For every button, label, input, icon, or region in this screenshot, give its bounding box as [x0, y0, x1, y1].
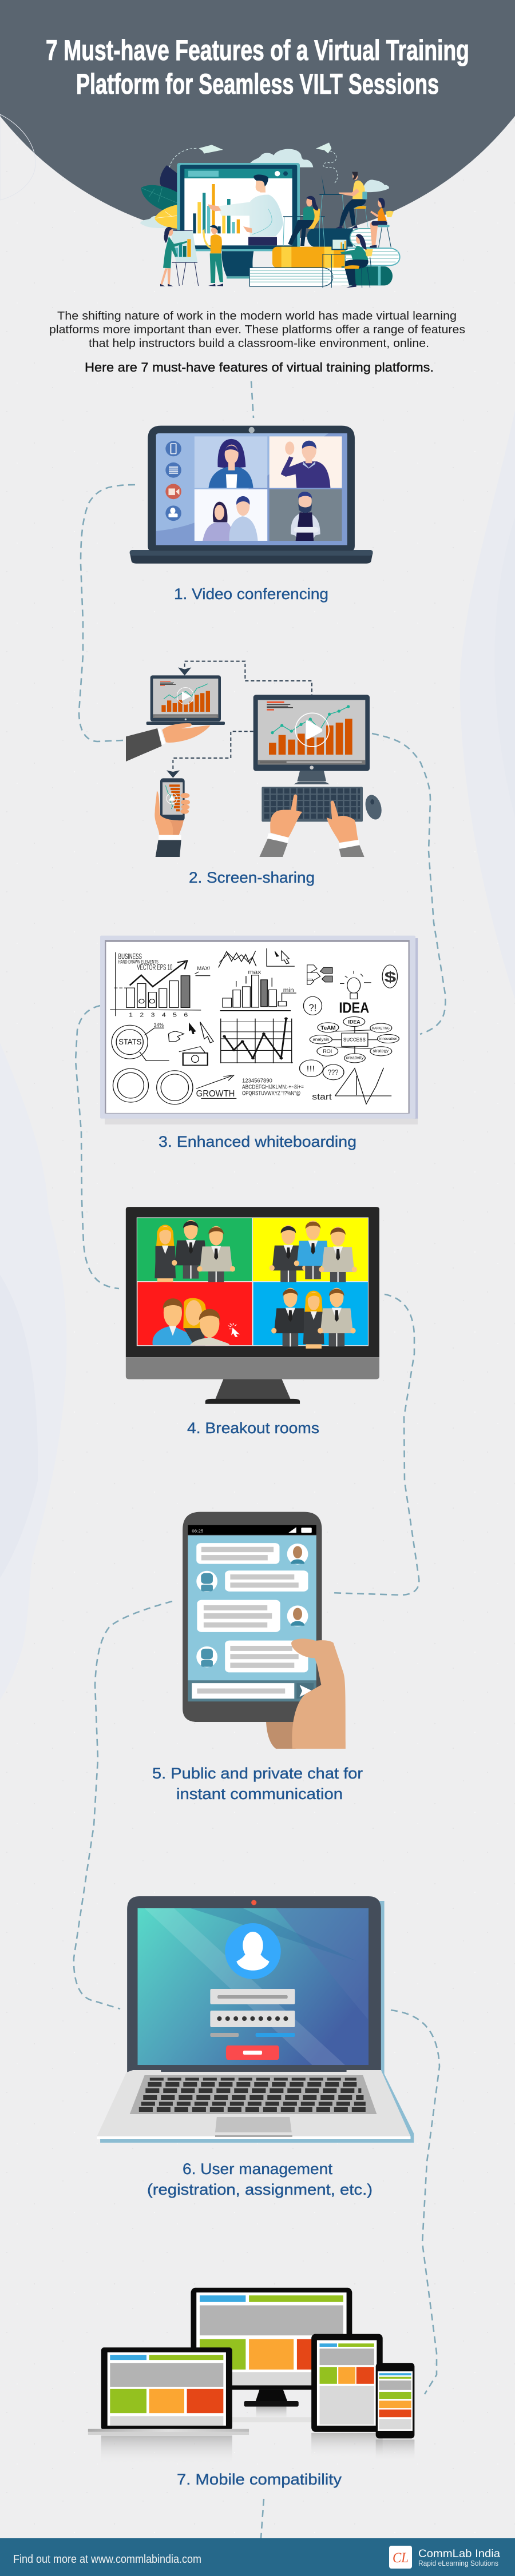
sketch: line graph grid [221, 1017, 293, 1063]
sketch: idea bulb, dollar and arrows: ?! [309, 1002, 316, 1014]
heading: enhanced whiteboarding: 3. Enhanced whiteboarding [159, 1133, 356, 1150]
sketch: mind map: MARKETING [372, 1026, 390, 1030]
tablet [311, 2334, 383, 2432]
sketch: stats wheel and cursors: 34% [154, 1023, 164, 1028]
leaves [141, 165, 177, 229]
heading: user management: (registration, assignment, etc.) [147, 2181, 373, 2198]
heading: user management: 6. User management [183, 2160, 333, 2178]
intro paragraph: platforms more important than ever. These platforms offer a range of features [49, 324, 465, 336]
sketch: mind map [310, 1017, 399, 1063]
feature 3: whiteboard with sketches: 123456 [129, 1012, 188, 1018]
sketch: mind map: IDEA [348, 1020, 360, 1025]
video tile: bearded man [270, 489, 342, 541]
sketch: rings, growth and lettering: start [312, 1092, 332, 1102]
smartphone [376, 2363, 414, 2438]
video tile: woman [195, 436, 267, 488]
dashed connector path between features [74, 381, 445, 2538]
desktop monitor [253, 695, 370, 784]
sketch: rings, growth and lettering [113, 1060, 391, 1104]
intro lead-in line: Here are 7 must-have features of virtual training platforms. [85, 360, 434, 374]
user avatar [225, 1923, 281, 1979]
status bar [192, 1527, 312, 1533]
heading: screen-sharing: 2. Screen-sharing [189, 869, 315, 886]
clouds [140, 149, 389, 228]
click cursor [228, 1323, 240, 1337]
sketch: rings, growth and lettering: ABCDEFGHIJKLMN:-+~8/+= [242, 1084, 304, 1090]
sketch: mind map: ROI [323, 1049, 332, 1055]
status bar: 08:25 [192, 1528, 203, 1533]
logo: CommLab India: CommLab India [418, 2548, 500, 2560]
sketch: idea bulb, dollar and arrows: IDEA [339, 1000, 369, 1016]
sketch: mind map: SUCCESS [343, 1037, 366, 1042]
heading: user management [147, 2160, 373, 2198]
sketch: rings, growth and lettering: OPQRSTUVWXYZ "!?%N°@ [242, 1091, 300, 1096]
room: green [137, 1218, 252, 1285]
sketch: idea bulb, dollar and arrows [303, 965, 398, 1016]
footer link text: Find out more at www.commlabindia.com [13, 2553, 201, 2566]
room: blue [253, 1282, 368, 1349]
intro paragraph [49, 310, 465, 350]
feature 3: whiteboard with sketches: HAND-DRAWN ELEMENTS [118, 960, 159, 965]
presenter [208, 174, 283, 245]
man at high desk [319, 172, 368, 229]
heading: video conferencing: 1. Video conferencing [174, 585, 328, 603]
heading: breakout rooms: 4. Breakout rooms [187, 1419, 319, 1437]
feature 3: whiteboard with sketches: min [283, 987, 294, 993]
smartphone in hand [154, 778, 190, 857]
sketch: mind map: innovation [379, 1036, 398, 1041]
feature 2: screen-sharing devices [126, 661, 384, 857]
reflections [101, 2407, 414, 2465]
message input bar [188, 1680, 316, 1701]
feature 3: whiteboard with sketches: MAX! [197, 966, 210, 971]
desktop monitor [191, 2288, 352, 2407]
chat bubbles [196, 1543, 308, 1672]
feature 7: responsive devices [88, 2288, 414, 2465]
logo: CommLab India [389, 2546, 500, 2569]
feature 1: laptop with video call [130, 426, 373, 564]
sketch: rings, growth and lettering: 1234567890 [242, 1078, 272, 1084]
feature 4: monitor with breakout rooms [126, 1207, 379, 1404]
feature 3: whiteboard with sketches: VECTOR EPS 10 [137, 963, 172, 972]
sketch: mind map: strategy [373, 1049, 389, 1053]
stacked books [221, 228, 400, 286]
feature 3: whiteboard with sketches: max [248, 970, 262, 975]
feature 5: phone with chat held in hand [183, 1512, 346, 1749]
icon: paper planes and flight paths [150, 142, 338, 197]
side toolbar icons [165, 441, 181, 521]
sketch: rings, growth and lettering: !!! [307, 1065, 315, 1074]
heading: public and private chat [152, 1765, 363, 1803]
heading: public and private chat: 5. Public and private chat for [152, 1765, 363, 1782]
title [46, 34, 469, 100]
sketch: bar chart top-left [110, 952, 210, 1016]
heading: mobile compatibility: 7. Mobile compatibility [177, 2471, 342, 2488]
sketch: mind map: TeAM [320, 1026, 336, 1031]
man pointing [203, 225, 223, 286]
woman at monitor [322, 234, 373, 288]
sharing arrows [167, 661, 312, 778]
holding hand [291, 1638, 346, 1749]
login fields and button [210, 1989, 295, 2060]
intro paragraph: that help instructors build a classroom-like environment, online. [89, 337, 429, 350]
feature 3: whiteboard with sketches: BUSINESS [118, 952, 142, 961]
logo: CommLab India: CL [393, 2550, 409, 2566]
logo: CommLab India: Rapid eLearning Solutions [418, 2559, 498, 2567]
hero illustration [140, 142, 400, 288]
room: yellow [253, 1218, 368, 1285]
heading: public and private chat: instant communication [176, 1785, 343, 1803]
sketch: stats wheel and cursors: STATS [118, 1038, 141, 1047]
room: red [138, 1282, 252, 1345]
sketch: mind map: analysis [312, 1037, 329, 1042]
typing hands [259, 795, 365, 857]
seated woman with laptop [283, 196, 325, 247]
sketch: rings, growth and lettering: ??? [328, 1068, 338, 1076]
woman at easel [160, 227, 199, 286]
screen with chart [177, 163, 300, 251]
keyboard and mouse [262, 787, 384, 822]
sketch: idea bulb, dollar and arrows: $ [385, 969, 397, 986]
woman on stool [370, 198, 394, 248]
sketch: rings, growth and lettering: GROWTH [196, 1088, 235, 1098]
video tile: couple [195, 489, 267, 541]
footer bar [0, 2538, 515, 2576]
feature 6: laptop with login form [97, 1896, 414, 2143]
handheld laptop [126, 675, 225, 761]
avatars [196, 1544, 308, 1667]
sketch: mind map: creativity [346, 1056, 364, 1060]
video tile: man with ok sign [270, 436, 342, 488]
laptop base and keyboard [97, 2069, 414, 2143]
feature 3: whiteboard with sketches [100, 936, 418, 1124]
header dark semicircle [0, 0, 515, 241]
intro paragraph: The shifting nature of work in the modern world has made virtual learning [57, 310, 457, 322]
sketch: stats wheel and cursors [112, 1022, 213, 1065]
laptop [88, 2347, 249, 2435]
sketch: zigzag and second bar chart [219, 948, 296, 1011]
